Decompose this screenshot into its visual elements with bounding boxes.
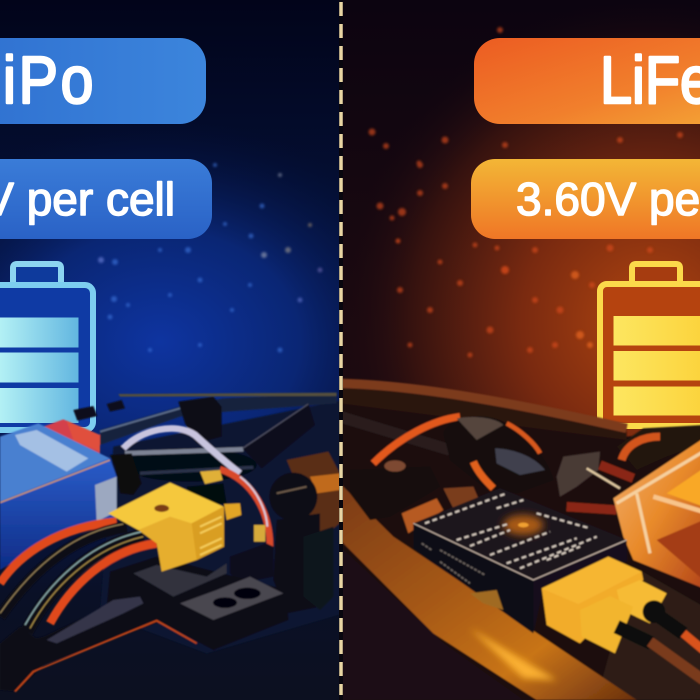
icon: yellow connectors and cables [542,557,700,680]
protection board box [413,488,627,633]
dark mass behind parts [100,400,343,653]
icon: yellow XT connector [108,483,241,572]
label: LiPo title pill [0,38,206,124]
panel: LiFePO4 side [340,0,700,700]
LiPo pack [0,419,142,570]
white and red wire [123,428,270,547]
dark rear ring and rods [123,403,343,540]
background: orange side [343,0,700,438]
dark clamp bar [73,393,337,445]
lower shadowed scene floor [340,380,700,700]
right-hand black gear block [187,470,333,613]
label: LiPo voltage pill [0,159,212,239]
hardware scene: LiPo pack and XT connector [0,393,343,692]
bundled wires [0,516,158,646]
hardware scene: LiFePO4 pack and protection board [340,380,700,700]
orange rail [340,483,637,700]
label: LiFePO4 title pill [474,38,700,124]
LiFePO4 pack [613,438,700,588]
icon: LiPo battery [0,264,93,430]
icon: LiFePO4 battery [600,264,700,426]
divider: dashed center line [339,0,343,700]
panel: LiPo side [0,0,343,700]
label: LiFePO4 voltage pill [471,159,700,239]
upper connector and wires [350,416,700,533]
base plate [0,557,288,692]
background: blue side [0,0,342,700]
